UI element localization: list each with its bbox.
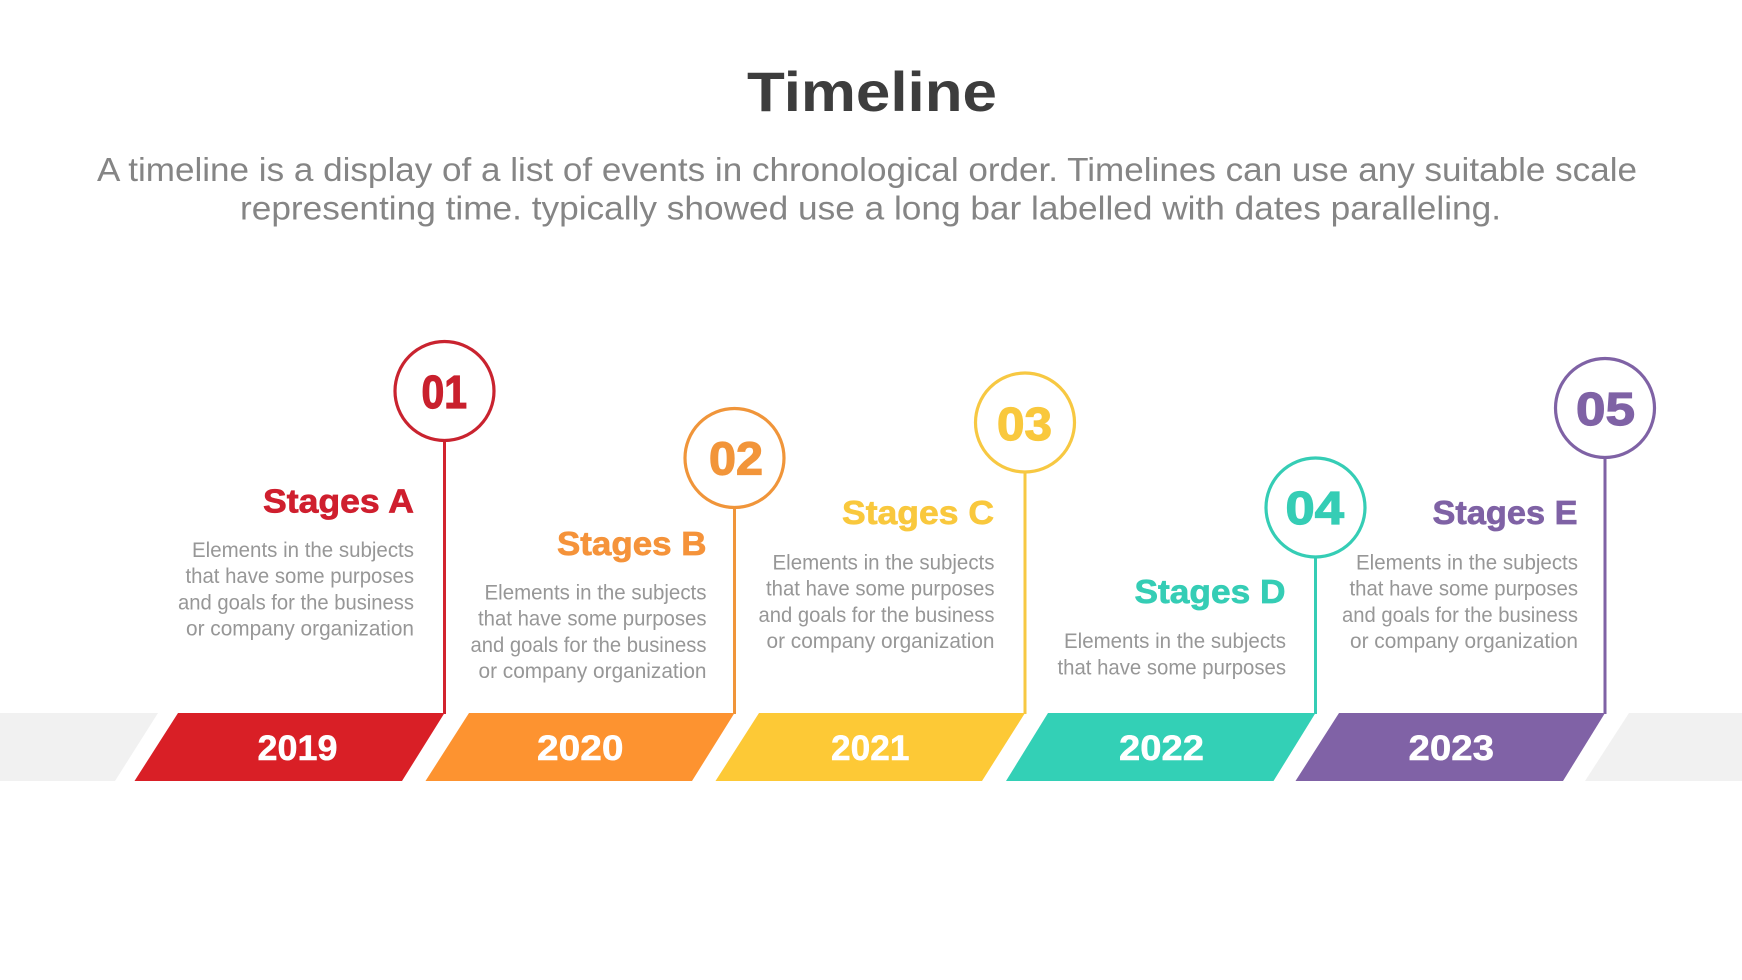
year bar 2021 <box>716 713 1025 781</box>
timeline bar: right grey lead-out <box>1585 713 1742 781</box>
number circle 05 <box>1556 358 1654 458</box>
description A: and goals for the business <box>178 590 414 614</box>
subtitle text block: A timeline is a display of a list of events in chronological order. Timelines can use any suitable scale <box>97 151 1637 188</box>
panel: stage 02 <box>426 408 784 781</box>
connector line 05 <box>1604 458 1606 714</box>
panel: stage 03 <box>716 373 1074 781</box>
description E <box>1342 550 1578 653</box>
year label 2022: 2022 <box>1119 729 1204 768</box>
panel: stage 01 <box>134 342 494 781</box>
description A: Elements in the subjects <box>192 538 414 562</box>
description A <box>178 538 414 640</box>
description B: Elements in the subjects <box>484 580 706 604</box>
year label 2020: 2020 <box>537 729 624 768</box>
description A: or company organization <box>186 616 414 640</box>
description E: and goals for the business <box>1342 603 1578 627</box>
heading Stages B: Stages B <box>557 525 706 562</box>
year label 2019: 2019 <box>258 729 338 768</box>
year bar 2019 <box>134 713 444 781</box>
panel: stage 04 <box>1006 458 1365 781</box>
description E: Elements in the subjects <box>1356 550 1578 574</box>
title: Timeline <box>747 60 997 123</box>
year label 2021: 2021 <box>831 729 910 768</box>
year bar 2023 <box>1296 713 1605 781</box>
description E: that have some purposes <box>1350 576 1578 600</box>
number 05: 05 <box>1576 383 1635 435</box>
description C: Elements in the subjects <box>772 550 994 574</box>
year label 2023: 2023 <box>1408 729 1494 768</box>
description B: or company organization <box>478 659 706 683</box>
connector line 02 <box>733 508 736 714</box>
description D: that have some purposes <box>1058 656 1286 680</box>
description C: and goals for the business <box>758 603 994 627</box>
description C <box>758 550 994 653</box>
description C: or company organization <box>766 629 994 653</box>
number 04: 04 <box>1286 482 1344 534</box>
description D <box>1058 629 1286 680</box>
subtitle text block: representing time. typically showed use a long bar labelled with dates paralleling. <box>240 190 1501 226</box>
description C: that have some purposes <box>766 576 994 600</box>
description B: and goals for the business <box>470 633 706 657</box>
heading Stages C: Stages C <box>842 494 994 531</box>
number 03: 03 <box>997 398 1052 450</box>
timeline bar: left grey lead-in <box>0 713 158 781</box>
year bar 2022 <box>1006 713 1316 781</box>
subtitle text block <box>97 151 1637 226</box>
connector line 03 <box>1024 472 1026 714</box>
number 02: 02 <box>709 432 763 484</box>
description A: that have some purposes <box>186 564 414 588</box>
number circle 02 <box>685 408 784 508</box>
description B: that have some purposes <box>478 606 706 630</box>
number circle 01 <box>395 342 494 440</box>
number circle 03 <box>976 373 1074 472</box>
heading Stages A: Stages A <box>263 482 414 520</box>
number 01: 01 <box>422 366 467 418</box>
heading Stages E: Stages E <box>1432 494 1578 531</box>
description B <box>470 580 706 683</box>
description D: Elements in the subjects <box>1064 629 1286 653</box>
panel: stage 05 <box>1296 358 1654 781</box>
heading Stages D: Stages D <box>1134 573 1286 610</box>
connector line 01 <box>443 441 446 714</box>
connector line 04 <box>1314 557 1317 714</box>
year bar 2020 <box>426 713 734 781</box>
description E: or company organization <box>1350 629 1578 653</box>
number circle 04 <box>1266 458 1365 557</box>
